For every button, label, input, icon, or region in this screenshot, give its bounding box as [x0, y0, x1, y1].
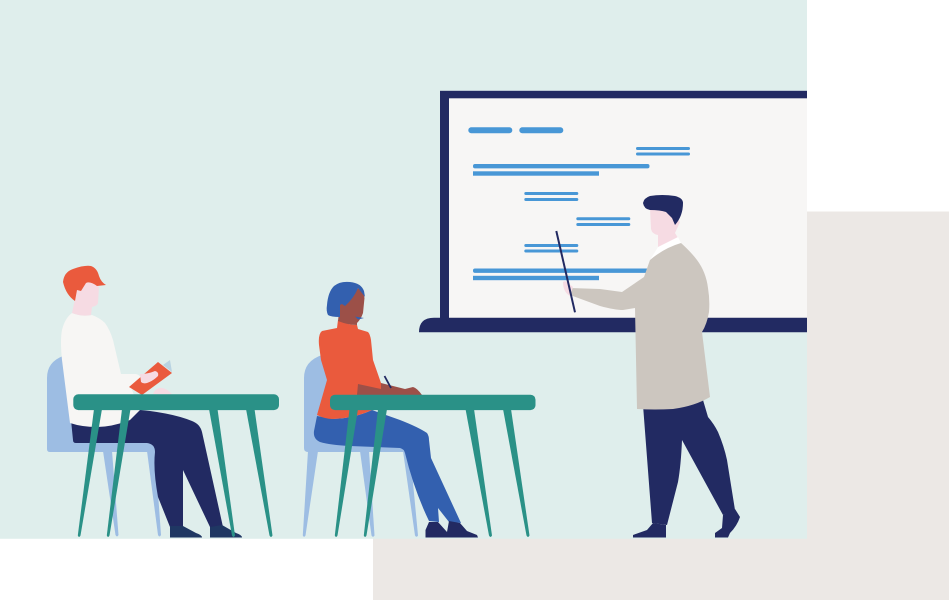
shoes: [426, 521, 478, 538]
trousers: [71, 409, 223, 527]
person: left student: [61, 266, 242, 538]
hand: [563, 281, 573, 296]
desk: left: [73, 394, 279, 537]
shoes: [633, 509, 740, 538]
whiteboard writing: [468, 127, 690, 280]
person: teacher: [556, 195, 740, 538]
trousers: [643, 400, 735, 525]
background: pale teal panel: [0, 0, 807, 539]
trousers: [314, 410, 461, 523]
desk: middle: [330, 395, 536, 537]
whiteboard ledge: [419, 318, 807, 332]
hair: [643, 195, 683, 225]
sweater: [317, 320, 381, 419]
chair: left student: [47, 356, 161, 536]
sweater: [61, 313, 141, 427]
hands: [140, 371, 172, 394]
background: grey blocks: [373, 212, 949, 600]
pointer stick: [556, 231, 575, 312]
earring strand: [355, 316, 364, 320]
whiteboard frame: [440, 91, 807, 323]
book pages: [163, 360, 172, 372]
shoes: [170, 525, 242, 538]
hair: [327, 282, 365, 317]
whiteboard: [419, 91, 807, 332]
arm and hand: [357, 383, 422, 395]
shirt collar: [650, 237, 682, 260]
neck and face: [72, 282, 99, 316]
chair: middle student: [303, 355, 418, 537]
person: middle student: [314, 282, 478, 538]
coat: [570, 243, 710, 410]
pen: [384, 376, 391, 388]
whiteboard surface: [449, 98, 807, 318]
neck and face: [338, 288, 364, 325]
book: [129, 362, 172, 395]
neck and face: [650, 208, 680, 248]
hair: [63, 266, 106, 301]
